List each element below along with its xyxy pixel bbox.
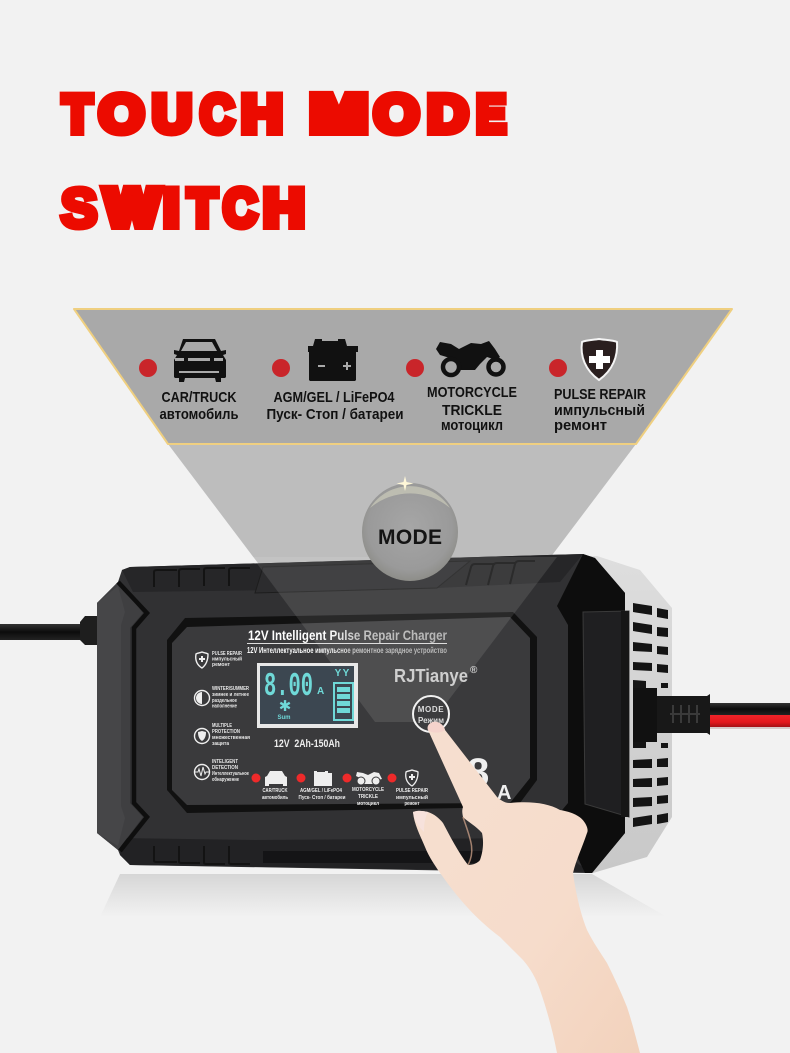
feature: multiple protection [194,723,250,747]
feature: intelligent detection [194,759,249,783]
panel mode indicators [252,770,428,807]
feature: pulse repair: ремонт [212,662,230,668]
control panel face [172,617,530,805]
option: motorcycle: MOTORCYCLE [427,384,517,401]
feature: multiple protection: защита [212,741,230,747]
fingernail: thumb [413,811,428,832]
indicator: motorcycle: MOTORCYCLE [352,787,384,793]
voltage spec: 12V 2Ah-150Ah [274,738,340,750]
control panel frame [167,612,537,813]
feature: intelligent detection: DETECTION [212,765,238,771]
feature: intelligent detection: INTELIGENT [212,759,238,765]
output connector [633,688,710,742]
feature: winter/summer: раздельное [212,698,237,704]
title: H [263,178,305,238]
sparkle [396,476,414,491]
hand [413,722,640,1053]
option: car/truck: CAR/TRUCK [162,389,237,406]
title: W [106,179,159,236]
feature: multiple protection: MULTIPLE [212,723,232,729]
right output cable [708,703,790,729]
feature: winter/summer [194,686,249,710]
indicator: pulse repair: ремонт [404,801,420,807]
option: motorcycle: TRICKLE [442,402,502,419]
option: car/truck: автомобиль [160,406,238,423]
title: C [223,178,257,238]
title: M [311,85,367,142]
indicator: motorcycle: мотоцикл [357,801,379,807]
title: T [188,178,217,238]
indicator: pulse repair: импульсный [396,794,428,801]
LCD display: Y [343,668,350,679]
feature: winter/summer: наполнение [212,704,237,710]
amperage mark: A [497,782,511,804]
mode ball [362,476,458,581]
feature: pulse repair: импульсный [212,656,242,662]
indicator: battery: Пуск- Стоп / батареи [298,794,346,801]
title: I [163,178,179,238]
indicator: battery: AGM/GEL / LiFePO4 [300,788,343,794]
side vents [633,603,668,827]
battery gauge [334,683,353,720]
option: pulse repair [549,339,646,434]
title: D [427,84,468,144]
title [61,84,506,239]
title: S [61,177,97,239]
indicator: car: автомобиль [262,794,288,801]
indicator: car [252,771,288,801]
option: motorcycle [406,341,517,434]
option: pulse repair: импульсный [554,402,645,419]
option: pulse repair: PULSE REPAIR [554,386,646,403]
panel: mode options trapezoid [74,309,732,444]
top ridges [154,561,535,587]
feature: intelligent detection: Интеллектуальное [212,771,249,777]
indicator: pulse repair: PULSE REPAIR [396,788,428,794]
mode ball: MODE [378,526,442,549]
title: T [63,84,92,144]
panel title: 12V Intelligent Pulse Repair Charger [248,628,448,643]
title: C [200,84,234,144]
main body [97,554,625,873]
feature: winter/summer: WINTER/SUMMER [212,686,249,692]
amperage mark [467,751,511,804]
option: battery: AGM/GEL / LiFePO4 [274,389,395,406]
LCD display: 8.00 [264,668,313,705]
indicator: battery [296,771,346,801]
indicator: motorcycle [342,772,384,807]
LCD display: Y [335,668,342,679]
option: motorcycle: мотоцикл [441,417,503,434]
feature: intelligent detection: обнаружение [212,776,239,783]
brand logo: RJTianye [394,666,468,686]
feature: winter/summer: зимнее и летнее [212,692,249,698]
charger [97,554,672,873]
option: battery: Пуск- Стоп / батареи [266,406,404,423]
feature: multiple protection: множественная [212,735,250,741]
left cap black edge [118,582,147,851]
LCD display: A [317,686,324,697]
mode touch button [413,696,449,732]
option: pulse repair: ремонт [554,417,607,434]
panel title: 12V Интеллектуальное импульсное ремонтное зарядное устройство [247,646,447,655]
LCD display: Sum [277,715,291,721]
left end cap [97,582,143,850]
amperage mark: 8 [467,751,489,795]
LCD display [257,663,358,728]
brand logo: ® [470,665,478,676]
feature: multiple protection: PROTECTION [212,729,240,735]
beam overlay on charger [252,557,557,722]
mode touch button: MODE [418,705,444,714]
indicator: motorcycle: TRICKLE [358,794,378,800]
bottom ridges [154,846,250,864]
panel title [247,628,448,655]
option: battery [266,339,404,423]
top band [122,554,583,592]
indicator: car: CAR/TRUCK [262,788,288,794]
title: H [241,84,283,144]
option: car/truck [139,339,238,423]
grey side housing [585,556,672,873]
title: O [99,84,144,143]
feature list [194,651,250,783]
title: U [152,85,192,144]
light beam [168,444,636,754]
title: O [374,84,419,143]
charger reflection [100,874,667,917]
mode touch button: Режим [418,716,444,725]
left power cable [0,616,99,645]
bottom band [120,838,590,872]
feature: pulse repair [196,651,242,668]
indicator: pulse repair [388,770,428,807]
feature: pulse repair: PULSE REPAIR [212,651,242,657]
title: E [476,85,506,144]
right black corner [557,554,625,873]
fingernail: index [428,722,445,733]
LCD display: ✱ [279,697,291,715]
hand creases [463,817,472,865]
